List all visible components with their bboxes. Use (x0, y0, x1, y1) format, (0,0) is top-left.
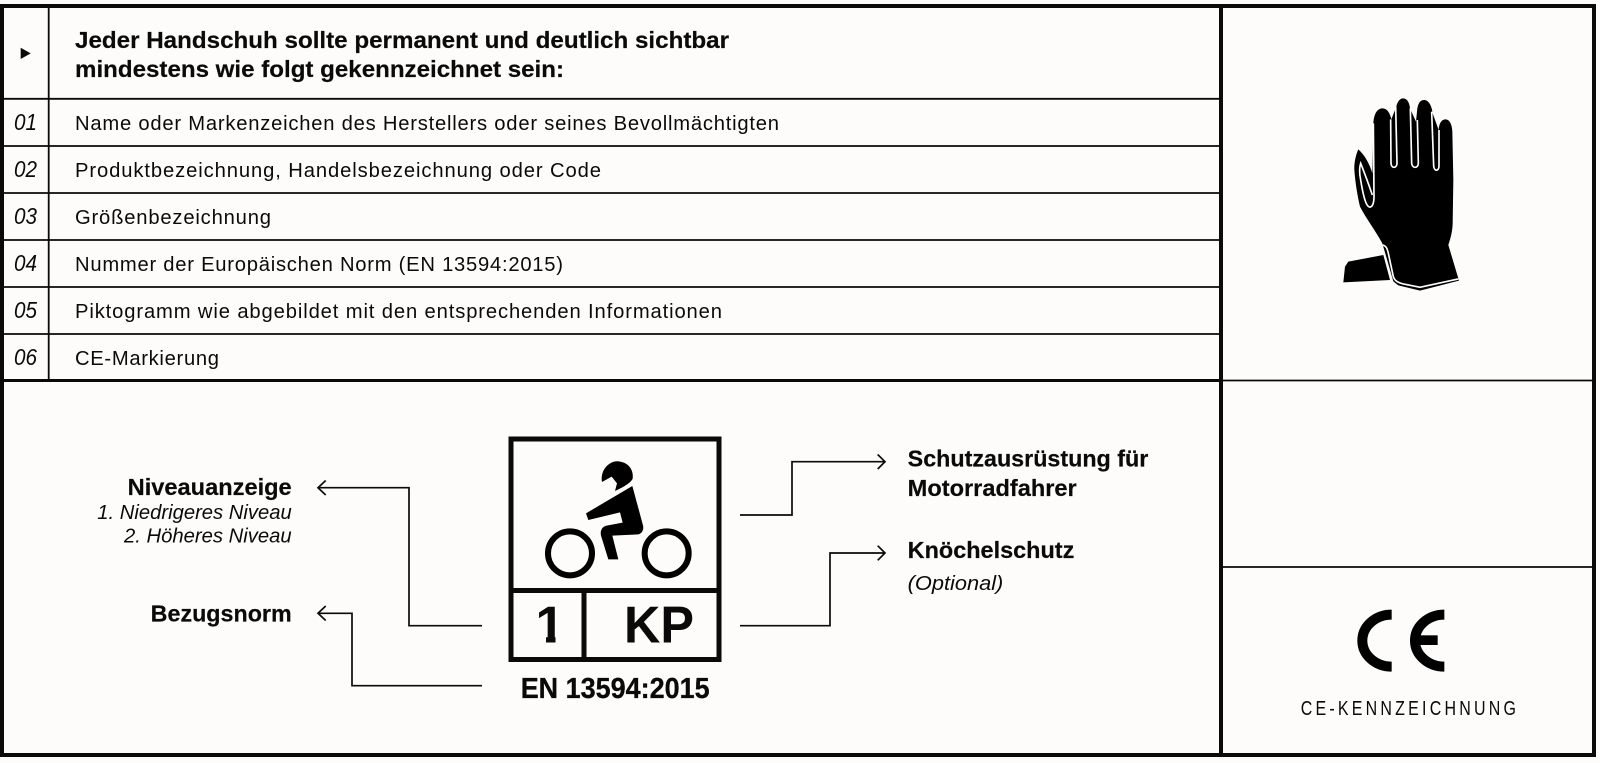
row 01: 01 (14, 109, 37, 135)
row 02: Produktbezeichnung, Handelsbezeichnung oder Code (75, 160, 601, 182)
arrow: to knuckle protection (740, 546, 885, 626)
row 03: Größenbezeichnung (75, 207, 271, 229)
standard number: EN 13594:2015 (521, 673, 710, 705)
row 02: 02 (14, 156, 37, 182)
panel: CE marking (1301, 615, 1516, 719)
label: protective equipment: Motorradfahrer (908, 475, 1077, 501)
icon: header triangle marker (21, 48, 31, 59)
label: protective equipment: Schutzausrüstung für (908, 446, 1148, 472)
heading (75, 27, 729, 82)
icon: motorcyclist (548, 461, 689, 575)
label: reference standard: Bezugsnorm (151, 601, 292, 627)
row 04: 04 (14, 250, 37, 276)
row 05: Piktogramm wie abgebildet mit den entsprechenden Informationen (75, 301, 722, 323)
row 06: 06 (14, 344, 37, 370)
arrow: to protective equipment (740, 454, 885, 515)
panel: marking requirements table (4, 8, 1221, 380)
row 04: Nummer der Europäischen Norm (EN 13594:2015) (75, 254, 563, 276)
arrow: to reference standard (318, 606, 482, 686)
label: level indicator (97, 474, 292, 548)
row 03: 03 (14, 203, 37, 229)
heading: Jeder Handschuh sollte permanent und deutlich sichtbar (75, 27, 729, 53)
row 05: 05 (14, 297, 37, 323)
label: protective equipment (908, 446, 1148, 501)
level number: 1 (536, 596, 564, 654)
row 06 (14, 344, 219, 370)
row 03 (14, 203, 271, 229)
icon: glove (1343, 98, 1459, 291)
caption: CE-KENNZEICHNUNG (1301, 696, 1516, 719)
row 06: CE-Markierung (75, 348, 219, 370)
label: knuckle protection (908, 537, 1074, 595)
arrow: to level indicator (318, 480, 482, 626)
pictogram label box (511, 439, 719, 705)
label: level indicator: 2. Höheres Niveau (123, 525, 292, 548)
panel: lower section with pictogram (97, 439, 1148, 705)
label: level indicator: Niveauanzeige (128, 474, 292, 500)
label: knuckle protection: Knöchelschutz (908, 537, 1074, 563)
heading: mindestens wie folgt gekennzeichnet sein: (75, 56, 564, 82)
row 01: Name oder Markenzeichen des Herstellers oder seines Bevollmächtigten (75, 113, 779, 135)
label: knuckle protection: (Optional) (908, 572, 1003, 595)
icon: CE mark (1362, 615, 1444, 667)
protection code: KP (624, 596, 694, 654)
label: level indicator: 1. Niedrigeres Niveau (97, 501, 292, 524)
